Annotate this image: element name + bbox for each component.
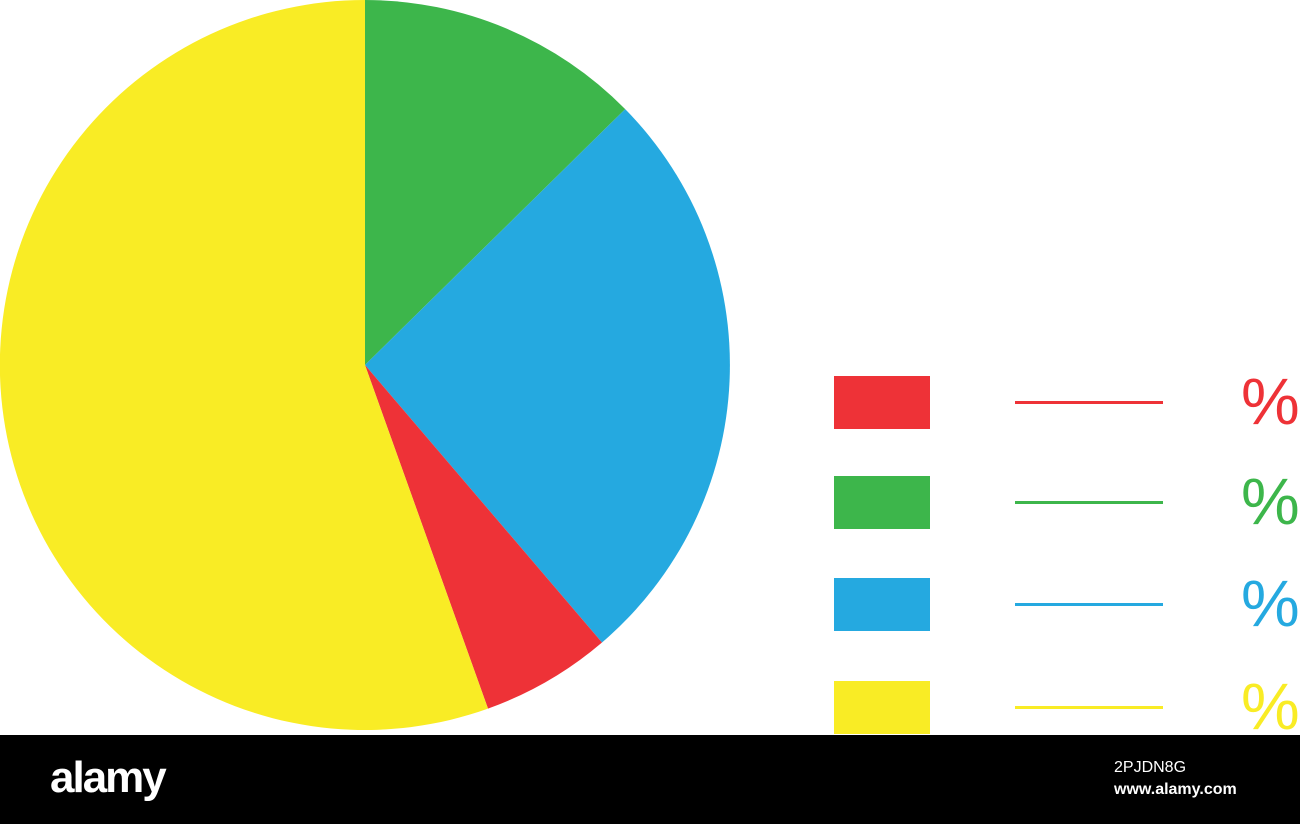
footer bar	[0, 735, 1300, 824]
slice: blue	[365, 109, 730, 643]
slice: yellow	[0, 0, 488, 730]
legend item: green	[834, 464, 1300, 538]
legend item: yellow	[834, 669, 1300, 735]
pie chart	[0, 0, 730, 730]
footer image id: 2PJDN8G	[1114, 759, 1186, 776]
legend	[834, 370, 1300, 735]
legend item: green: %	[1241, 464, 1300, 538]
slice: red	[365, 365, 602, 709]
footer logo: alamy	[50, 753, 165, 802]
legend item: blue	[834, 566, 1300, 640]
legend item: red	[834, 370, 1300, 438]
slice: green	[365, 0, 625, 365]
footer url: www.alamy.com	[1114, 781, 1237, 798]
legend item: blue: %	[1241, 566, 1300, 640]
